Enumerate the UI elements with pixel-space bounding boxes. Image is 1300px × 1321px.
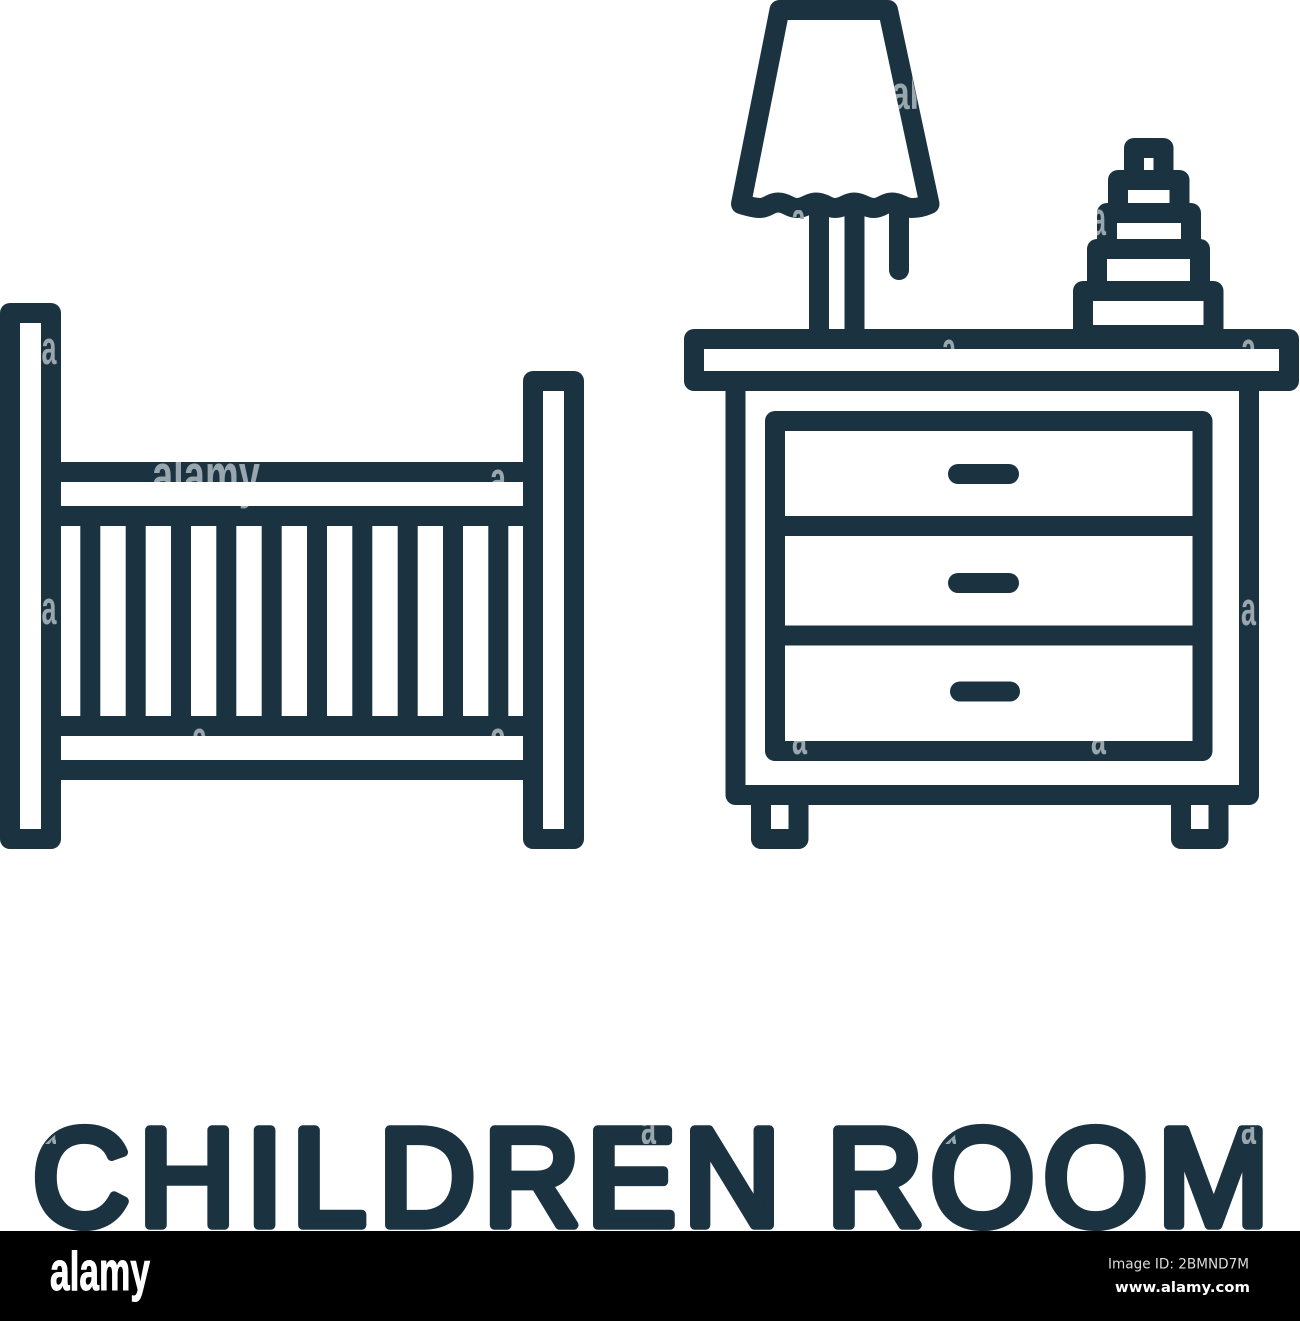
watermark marks: a <box>42 581 57 634</box>
watermark marks: a <box>490 452 507 505</box>
lamp shade <box>741 10 930 208</box>
alamy logo: alamy <box>50 1240 150 1302</box>
drawer frame <box>775 421 1202 751</box>
watermark marks: a <box>42 1101 57 1154</box>
crib rails <box>51 472 533 770</box>
dresser top <box>694 339 1289 381</box>
watermark marks: alamy <box>152 442 260 509</box>
watermark marks: a <box>641 1101 656 1154</box>
icon: stacking pyramid toy <box>1083 148 1214 335</box>
pyramid ring 2 <box>1118 180 1180 213</box>
watermark marks: al <box>891 66 919 119</box>
lamp cord <box>889 212 909 270</box>
pyramid ring 5 <box>1083 291 1214 335</box>
pyramid ring 4 <box>1097 249 1200 291</box>
website url: www.alamy.com <box>1115 1280 1250 1296</box>
watermark marks: a <box>1241 582 1256 635</box>
watermark marks: a <box>792 711 807 764</box>
watermark marks: alamy <box>152 442 260 509</box>
dresser body <box>736 381 1249 795</box>
pyramid ring 1 <box>1134 148 1164 180</box>
watermark marks <box>42 66 1256 1154</box>
watermark marks: a <box>42 321 57 374</box>
lamp stem <box>819 212 854 332</box>
watermark marks: a <box>792 192 806 245</box>
watermark marks: a <box>1241 322 1256 375</box>
crib slats <box>90 516 498 726</box>
footer bar <box>0 1231 1300 1321</box>
image id: Image ID: 2BMND7M <box>1108 1256 1249 1272</box>
pyramid ring 3 <box>1107 213 1191 249</box>
icon: table lamp <box>741 10 930 332</box>
icon: crib <box>10 313 574 839</box>
drawer dividers <box>775 526 1202 636</box>
watermark marks: a <box>942 322 956 375</box>
watermark marks: a <box>1241 1101 1256 1154</box>
watermark marks: a <box>1091 711 1106 764</box>
crib right post <box>533 381 574 839</box>
watermark marks: a <box>192 711 207 764</box>
watermark marks: a <box>942 1101 957 1154</box>
watermark marks: a <box>1092 192 1106 245</box>
icon: chest of drawers <box>694 339 1289 839</box>
crib left post <box>10 313 51 839</box>
drawer handles <box>958 474 1010 692</box>
dresser feet <box>761 795 1218 839</box>
title: CHILDREN ROOM <box>33 1100 1269 1254</box>
watermark marks: a <box>490 711 507 764</box>
